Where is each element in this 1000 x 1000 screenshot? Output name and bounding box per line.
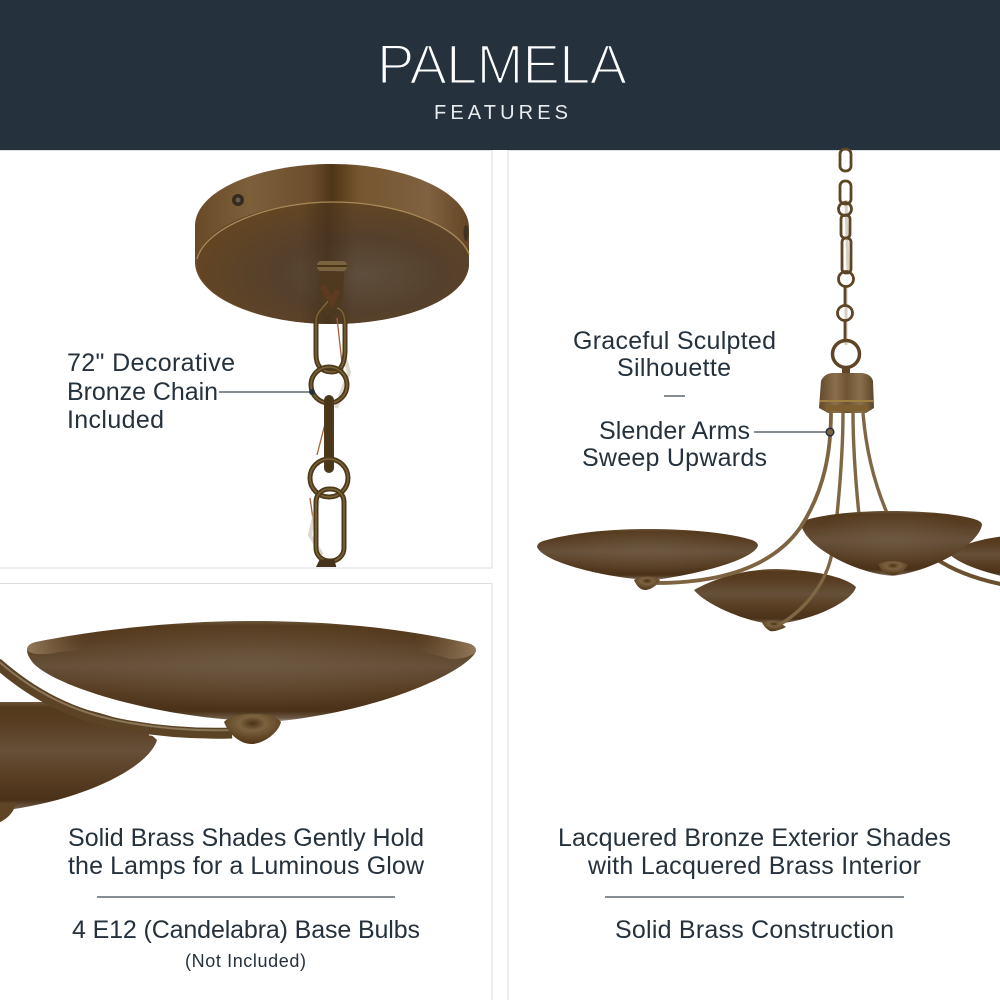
knob	[224, 714, 281, 744]
chain collar	[317, 261, 347, 316]
panel: brass shades	[0, 584, 492, 1000]
canopy screws	[232, 194, 244, 206]
construction text: Solid Brass Construction	[615, 916, 894, 944]
callout text: chain: 72" Decorative	[67, 349, 235, 377]
shade description text: the Lamps for a Luminous Glow	[68, 852, 425, 880]
callout text: chain	[67, 349, 235, 434]
hub	[819, 366, 874, 413]
large shade	[27, 621, 476, 721]
finish description text	[558, 824, 951, 880]
panel: bronze chain	[0, 150, 492, 568]
header band	[0, 0, 1000, 150]
main arm	[655, 412, 831, 583]
knobs	[634, 561, 908, 631]
finish description text: with Lacquered Brass Interior	[587, 852, 921, 880]
hanging chain	[832, 149, 860, 368]
lower shade	[0, 702, 157, 811]
finish description text: Lacquered Bronze Exterior Shades	[558, 824, 951, 852]
small knob	[0, 802, 16, 823]
callout text: arms	[582, 417, 767, 472]
left shade	[537, 529, 758, 580]
front right shade	[801, 511, 982, 576]
callout text: arms: Sweep Upwards	[582, 444, 767, 472]
bulb text: 4 E12 (Candelabra) Base Bulbs	[72, 916, 420, 944]
chain	[310, 286, 349, 568]
callout text: chain: Bronze Chain	[67, 378, 218, 406]
shade description text: Solid Brass Shades Gently Hold	[68, 824, 424, 852]
rear right shade	[935, 536, 1000, 585]
callout text: arms: Slender Arms	[599, 417, 750, 445]
callout text: chain: Included	[67, 406, 164, 434]
callout text: silhouette: Silhouette	[617, 354, 731, 382]
shade description text	[68, 824, 425, 880]
callout text: silhouette: Graceful Sculpted	[573, 327, 776, 355]
arm	[0, 663, 232, 733]
rear arms	[779, 413, 887, 625]
subtitle: FEATURES	[434, 102, 568, 124]
leader line: chain	[219, 389, 315, 395]
gap beneath shade	[150, 728, 232, 732]
mid shade	[694, 569, 856, 624]
title: PALMELA	[377, 32, 628, 96]
leader line: arms	[754, 428, 834, 436]
not included note: (Not Included)	[185, 951, 306, 971]
callout text: silhouette	[573, 327, 776, 382]
ceiling canopy	[195, 164, 469, 324]
panel: chandelier	[508, 149, 1000, 1000]
